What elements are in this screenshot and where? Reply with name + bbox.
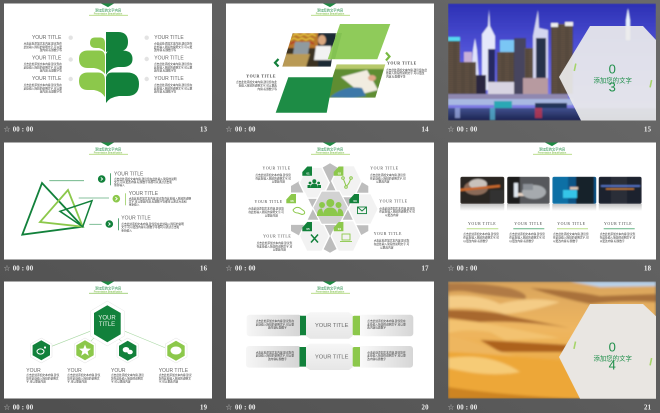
- row 1: 改内容标题数字: [268, 326, 287, 330]
- left items: 此处输入简短的说明文字,可以更: [24, 86, 62, 90]
- text: bottom right: 点击此处添加文本内容,建议您: [374, 239, 410, 243]
- footer 17: 17: [422, 266, 429, 273]
- text 4: YOUR TITLE: [159, 368, 189, 374]
- item 2: 重新输入: [129, 203, 140, 207]
- text: top right: 在此处输入简短的说明文字,可: [370, 176, 406, 180]
- right items: 此处输入简短的说明文字,可以更: [154, 65, 193, 69]
- photo: person with laptop: [280, 33, 340, 67]
- text: bottom left: 在此处输入简短的说明文字,可: [257, 244, 293, 248]
- panel: slide 20 pill rows: [226, 282, 434, 398]
- slide header: 添加您的文字内容: [539, 147, 566, 152]
- item 1: 重新输入: [114, 183, 125, 187]
- footer 19: [4, 404, 208, 412]
- icon: envelope: [358, 207, 366, 214]
- item 3: YOUR TITLE: [121, 216, 151, 222]
- row 1: YOUR TITLE: [315, 323, 349, 329]
- slide header: 添加您的文字内容: [317, 147, 344, 152]
- row 1: 点击此处添加文本内容,建议您在: [256, 319, 294, 323]
- text: left block: 处输入简短的说明文字,可以更改: [239, 83, 277, 87]
- panel: slide 13 leaf diagram: [4, 4, 212, 120]
- text: top left: 以更改内容: [272, 180, 285, 184]
- footer 16: 00 : 00: [13, 266, 34, 273]
- text 1: 点击此处添加文本内容,建议: [26, 373, 60, 377]
- root hexagon: YOUR: [98, 315, 116, 321]
- slide header: [311, 142, 350, 155]
- slide header: Presentation Beautification: [316, 152, 345, 155]
- photo: sand dunes: [448, 282, 656, 399]
- text: bottom right: YOUR TITLE: [374, 232, 402, 236]
- section number and caption: 添加您的文字: [594, 354, 632, 363]
- reflections: [460, 204, 642, 211]
- badges: 02: [338, 172, 341, 176]
- footer 18: [448, 264, 652, 273]
- footer 21: 21: [644, 405, 652, 412]
- slide header: Presentation Beautification: [94, 13, 123, 16]
- text: left block: YOUR TITLE: [246, 75, 276, 79]
- right items: [144, 35, 193, 94]
- arrows: [49, 181, 109, 224]
- column 2: [509, 222, 545, 243]
- column 1: 在此处输入简短的说明文字,可: [463, 236, 499, 240]
- slide header: 添加您的文字内容: [317, 286, 344, 291]
- panel: slide 14 parallelograms: [226, 4, 434, 120]
- left items: YOUR TITLE: [32, 56, 62, 62]
- column 3: YOUR TITLE: [557, 222, 586, 226]
- shape: light green parallelogram: [328, 24, 390, 59]
- text: right: YOUR TITLE: [379, 199, 408, 203]
- footer 18: 18: [644, 266, 652, 273]
- row 1: 改内容标题数字: [367, 326, 386, 330]
- footer 16: [4, 264, 208, 273]
- text: right block: 点击此处添加文本内容,建议您在此: [386, 68, 427, 72]
- text 3: YOUR: [111, 368, 126, 374]
- text: right block: YOUR TITLE: [387, 62, 417, 66]
- section number and caption: [573, 62, 652, 94]
- footer 17: 00 : 00: [235, 266, 256, 273]
- footer 14: 00 : 00: [235, 127, 256, 134]
- row 1: 此处输入简短的说明文字,可以更: [256, 322, 294, 326]
- right items: 改内容,标题数字等: [154, 48, 177, 52]
- item 1: 点击此处添加文本内容,建议您在此处输入简短的说明: [114, 177, 177, 181]
- text 2: 点击此处添加文本内容,建议: [67, 373, 101, 377]
- text: right: 以更改内容: [385, 213, 399, 217]
- text: right: 点击此处添加文本内容,建议您: [379, 206, 415, 210]
- row 2: 改内容标题数字: [367, 357, 386, 361]
- photo: night city skyline: [448, 4, 656, 120]
- icon: left chevron: [275, 59, 278, 66]
- icon: team: [308, 179, 321, 188]
- text: right: 在此处输入简短的说明文字,可: [379, 210, 415, 214]
- text: bottom right: 以更改内容: [380, 245, 394, 249]
- column 4: 点击此处添加文本内容,建议您: [600, 232, 636, 236]
- slide header: 添加您的文字内容: [95, 8, 122, 13]
- text 2: YOUR: [67, 368, 82, 374]
- footer 13: ☆: [4, 126, 10, 134]
- root hexagon: [90, 301, 124, 346]
- footer 19: ☆: [4, 404, 10, 412]
- footer 15: ☆: [448, 126, 454, 134]
- text: left block: 点击此处添加文本内容,建议您在此: [236, 80, 277, 84]
- item 1: YOUR TITLE: [114, 172, 144, 178]
- item 3: 重新输入: [121, 228, 132, 232]
- icon: handshake: [293, 207, 305, 214]
- column 3: 在此处输入简短的说明文字,可: [553, 236, 589, 240]
- photo 4: [598, 176, 642, 204]
- row 2: 点击此处添加文本内容,建议您在: [256, 350, 294, 354]
- section number and caption: 添加您的文字: [594, 76, 632, 85]
- panel: slide 18 photo row: [448, 142, 656, 260]
- text: top left: 点击此处添加文本内容,建议您: [255, 173, 291, 177]
- text: top right: [370, 166, 406, 184]
- photo 1: [460, 176, 505, 204]
- node 2: [74, 338, 96, 363]
- icon: branch: [342, 177, 352, 188]
- icon: laptop: [340, 234, 352, 242]
- slide header: [89, 4, 128, 16]
- row 2: YOUR TITLE: [315, 355, 349, 361]
- slide header: 添加您的文字内容: [95, 147, 122, 152]
- text 3: [111, 368, 144, 384]
- column 2: YOUR TITLE: [514, 222, 543, 226]
- column 4: YOUR TITLE: [604, 222, 632, 226]
- column 1: 点击此处添加文本内容,建议您: [463, 232, 499, 236]
- right items: 点击此处添加文本内容,建议您在: [154, 42, 193, 46]
- text 4: [159, 368, 192, 384]
- icon: leaf tree: [79, 32, 139, 103]
- text 1: [26, 368, 60, 384]
- text 3: 您在此处输入简短的说明文: [111, 376, 144, 380]
- icon: tools: [311, 234, 318, 242]
- slide header: Presentation Beautification: [316, 13, 345, 16]
- text: top left: 在此处输入简短的说明文字,可: [255, 176, 291, 180]
- photo 3: [552, 176, 597, 204]
- slide header: Presentation Beautification: [94, 152, 123, 155]
- footer 13: 13: [200, 127, 208, 134]
- chart: hexagon wheel: [282, 163, 378, 253]
- left items: 改内容,标题数字等: [40, 90, 62, 94]
- slide header: [89, 142, 128, 155]
- section number and caption: 0: [609, 340, 616, 354]
- slide header: [89, 282, 128, 294]
- left items: 此处输入简短的说明文字,可以更: [24, 65, 62, 69]
- text: bottom left: [257, 234, 293, 252]
- text: right: [379, 199, 415, 217]
- footer 20: 20: [422, 405, 429, 412]
- text: bottom left: 以更改内容: [273, 248, 286, 252]
- slide header: Presentation Beautification: [538, 152, 567, 155]
- text 2: [67, 368, 101, 384]
- shape: dark green parallelogram: [276, 77, 333, 113]
- footer 14: 14: [422, 127, 429, 134]
- text: left: 在此处输入简短的说明文字,可: [248, 210, 284, 214]
- right items: 改内容,标题数字等: [154, 69, 177, 73]
- text: top right: YOUR TITLE: [370, 166, 399, 170]
- icon: right chevron: [386, 52, 390, 60]
- row 1: 此处输入简短的说明文字,可以更: [367, 322, 406, 326]
- left items: YOUR TITLE: [32, 35, 62, 41]
- right items: 点击此处添加文本内容,建议您在: [154, 83, 193, 87]
- footer 15: [448, 126, 652, 134]
- text: left: 以更改内容: [265, 213, 278, 217]
- item 3: 文字,可以更改内容,标题数字等都可以通过点击和: [121, 225, 180, 229]
- text: top left: YOUR TITLE: [262, 166, 291, 170]
- text 4: 字,可以更改内容: [159, 380, 179, 384]
- callout: hexagon: [559, 26, 656, 120]
- node 3: [117, 338, 138, 363]
- node 1: [30, 338, 52, 363]
- badges: 05: [306, 227, 310, 231]
- text 3: 点击此处添加文本内容,建议: [111, 373, 144, 377]
- left items: [24, 35, 73, 94]
- panel: slide 21 desert section: [448, 282, 656, 399]
- column 4: [600, 222, 636, 243]
- column 1: 以更改内容,标题数字: [463, 239, 489, 243]
- root hexagon: TITLE: [99, 322, 115, 328]
- text 2: 字,可以更改内容: [67, 380, 87, 384]
- item 2: 点击此处添加文本内容,建议您在此处输入简短的说明: [129, 196, 192, 200]
- row 2: 此处输入简短的说明文字,可以更: [256, 354, 294, 358]
- footer 17: ☆: [226, 264, 232, 272]
- column 1: [463, 222, 499, 243]
- text: right block: [386, 62, 427, 79]
- badges: [286, 166, 359, 231]
- badges: 01: [306, 172, 310, 176]
- row 1: [247, 312, 413, 339]
- photo: writing on grass: [325, 64, 387, 98]
- row 2: 此处输入简短的说明文字,可以更: [367, 354, 406, 358]
- slide header: 添加您的文字内容: [95, 286, 122, 291]
- text: left: YOUR TITLE: [254, 200, 283, 204]
- left items: 点击此处添加文本内容,建议您在: [24, 83, 62, 87]
- chart: overlapping triangles: [22, 183, 92, 235]
- callout: hexagon: [559, 304, 656, 399]
- slide header: 添加您的文字内容: [317, 8, 344, 13]
- right items: YOUR TITLE: [154, 35, 184, 41]
- left items: 点击此处添加文本内容,建议您在: [24, 42, 62, 46]
- footer 14: ☆: [226, 126, 232, 134]
- panel: slide 19 hexagon tree: [4, 282, 212, 398]
- item 1: [98, 172, 177, 187]
- section number and caption: 4: [609, 358, 616, 373]
- text: top left: [255, 166, 291, 184]
- text: bottom right: [374, 232, 410, 249]
- slide header: [533, 142, 572, 155]
- badges: 06: [290, 199, 294, 203]
- left items: 此处输入简短的说明文字,可以更: [24, 45, 62, 49]
- column 3: 以更改内容,标题数字: [553, 239, 578, 243]
- column 4: 在此处输入简短的说明文字,可: [600, 236, 636, 240]
- text: left block: [236, 75, 277, 91]
- footer 19: 00 : 00: [13, 405, 34, 412]
- footer 13: [4, 126, 208, 134]
- footer 16: ☆: [4, 264, 10, 272]
- text: left: [248, 200, 284, 217]
- footer 15: 15: [644, 126, 652, 133]
- slide header: [311, 282, 350, 294]
- section number and caption: [573, 340, 652, 373]
- footer 21: [448, 404, 652, 412]
- footer 20: 00 : 00: [235, 405, 256, 412]
- footer 20: ☆: [226, 404, 232, 412]
- footer 18: 00 : 00: [457, 266, 478, 273]
- text 4: 您在此处输入简短的说明文: [159, 376, 191, 380]
- row 1: 点击此处添加文本内容,建议您在: [367, 319, 406, 323]
- column 2: 以更改内容,标题数字: [509, 239, 535, 243]
- badges: 03: [353, 199, 357, 203]
- right items: 改内容,标题数字等: [154, 90, 177, 94]
- column 1: YOUR TITLE: [468, 222, 496, 226]
- text: top right: 点击此处添加文本内容,建议您: [370, 173, 406, 177]
- footer 13: 00 : 00: [13, 127, 34, 134]
- item 3: [106, 216, 184, 232]
- column 2: 在此处输入简短的说明文字,可: [509, 236, 545, 240]
- panel: slide 15 city photo section: [448, 4, 656, 120]
- right items: 点击此处添加文本内容,建议您在: [154, 62, 193, 66]
- left items: 改内容,标题数字等: [40, 69, 62, 73]
- footer 19: 19: [200, 405, 208, 412]
- left items: 点击此处添加文本内容,建议您在: [24, 62, 62, 66]
- icon: central people: [317, 199, 344, 216]
- node 4: [165, 338, 187, 363]
- text 1: 字,可以更改内容: [26, 380, 46, 384]
- column 3: 点击此处添加文本内容,建议您: [553, 232, 589, 236]
- text 4: 点击此处添加文本内容,建议: [159, 373, 192, 377]
- column 2: 点击此处添加文本内容,建议您: [509, 232, 545, 236]
- item 2: YOUR TITLE: [129, 191, 159, 197]
- section number and caption: 0: [609, 62, 616, 76]
- slide header: [311, 4, 350, 16]
- right items: 此处输入简短的说明文字,可以更: [154, 45, 193, 49]
- right items: 此处输入简短的说明文字,可以更: [154, 86, 193, 90]
- row 2: 改内容标题数字: [268, 357, 287, 361]
- row 2: [246, 344, 413, 370]
- footer 18: ☆: [448, 264, 454, 272]
- shape: translucent edge: [331, 33, 342, 59]
- text: left: 点击此处添加文本内容,建议您: [248, 207, 284, 211]
- footer 16: 16: [200, 266, 208, 273]
- text: top right: 以更改内容: [376, 180, 390, 184]
- text: bottom right: 在此处输入简短的说明文字,可: [374, 242, 410, 246]
- footer 21: 00 : 00: [457, 405, 478, 412]
- slide header: Presentation Beautification: [316, 291, 345, 294]
- footer 21: ☆: [448, 404, 454, 412]
- footer 20: [226, 404, 429, 412]
- column 4: 以更改内容,标题数字: [600, 239, 625, 243]
- footer 15: 00 : 00: [457, 126, 478, 133]
- item 2: 文字,可以更改内容,标题数字等都可以通过点击和: [129, 200, 187, 204]
- footer 17: [226, 264, 429, 273]
- text 1: YOUR: [26, 368, 41, 374]
- item 1: 文字,可以更改内容,标题数字等都可以通过点击和: [114, 180, 172, 184]
- text: bottom left: YOUR TITLE: [263, 234, 291, 238]
- text 1: 您在此处输入简短的说明文: [26, 376, 59, 380]
- photo 2: [507, 176, 550, 204]
- panel: slide 16 triangles: [4, 142, 212, 260]
- left items: YOUR TITLE: [32, 76, 62, 82]
- text: bottom left: 点击此处添加文本内容,建议您: [257, 241, 293, 245]
- right items: YOUR TITLE: [154, 56, 184, 62]
- text: right block: 内容,标题数字等: [386, 75, 406, 79]
- item 3: 点击此处添加文本内容,建议您在此处输入简短的说明: [121, 222, 184, 226]
- text: left block: 内容,标题数字等: [257, 87, 277, 91]
- column 3: [553, 222, 589, 243]
- badges: 04: [338, 227, 341, 231]
- text 2: 您在此处输入简短的说明文: [67, 376, 100, 380]
- text: right block: 处输入简短的说明文字,可以更改: [386, 71, 425, 75]
- text 3: 字,可以更改内容: [111, 380, 131, 384]
- item 2: [112, 191, 192, 207]
- left items: 改内容,标题数字等: [40, 48, 62, 52]
- connector lines: [52, 331, 166, 348]
- footer 14: [226, 126, 429, 134]
- right items: YOUR TITLE: [154, 76, 184, 82]
- section number and caption: 3: [609, 80, 616, 94]
- row 2: 点击此处添加文本内容,建议您在: [367, 350, 406, 354]
- slide header: Presentation Beautification: [94, 291, 123, 294]
- panel: slide 17 hexagon cluster: [226, 142, 434, 260]
